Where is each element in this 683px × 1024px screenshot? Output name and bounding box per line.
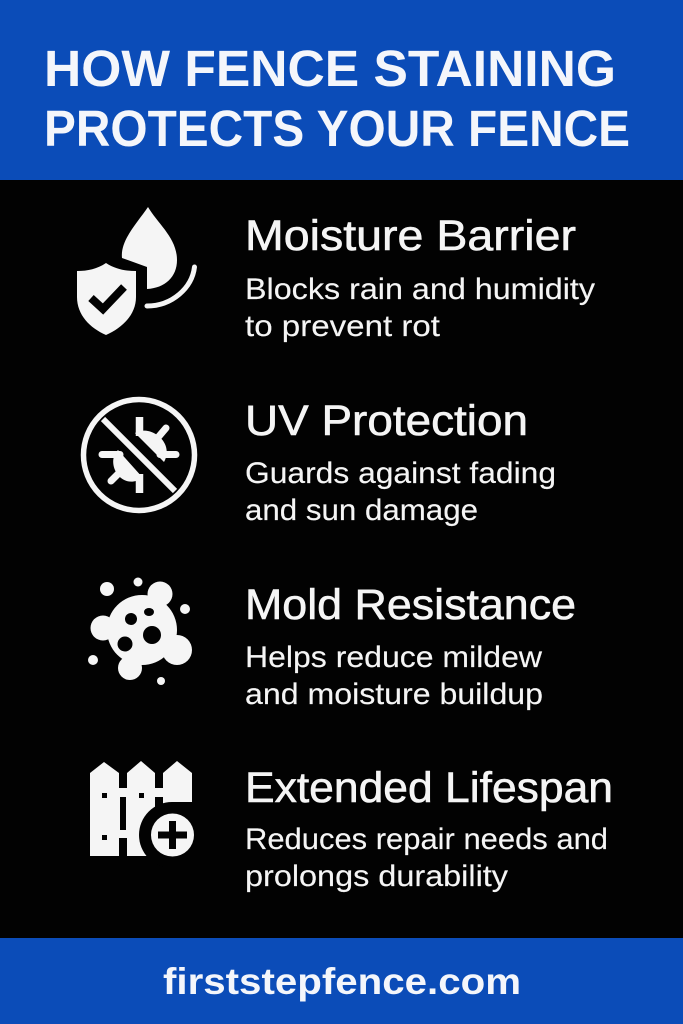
heading: moisture barrier: Moisture Barrier <box>245 213 576 260</box>
text: extended lifespan description <box>245 823 608 893</box>
text: extended lifespan description: Reduces repair needs and <box>245 823 608 856</box>
title <box>44 40 630 157</box>
footer banner <box>0 938 683 1024</box>
panel: uv protection <box>84 398 556 527</box>
text: uv protection description: and sun damage <box>245 494 478 527</box>
text: extended lifespan description: prolongs durability <box>245 860 508 893</box>
panel: mold resistance <box>88 578 576 711</box>
icon: water drop and shield <box>77 207 194 335</box>
text: moisture barrier description: Blocks rain and humidity <box>245 273 595 306</box>
header banner <box>0 0 683 180</box>
text: mold resistance description: Helps reduce mildew <box>245 641 542 674</box>
icon: mold spore <box>88 578 192 685</box>
heading: mold resistance: Mold Resistance <box>245 582 576 629</box>
icon: fence with plus <box>90 761 200 868</box>
text: moisture barrier description: to prevent rot <box>245 310 441 343</box>
panel: extended lifespan <box>90 761 613 893</box>
heading: extended lifespan: Extended Lifespan <box>245 765 613 812</box>
text: moisture barrier description <box>245 273 595 343</box>
title: PROTECTS YOUR FENCE <box>44 100 630 157</box>
text: mold resistance description <box>245 641 543 711</box>
panel: moisture barrier <box>77 207 595 343</box>
text: mold resistance description: and moisture buildup <box>245 678 543 711</box>
heading: uv protection: UV Protection <box>245 398 528 445</box>
text: uv protection description: Guards against fading <box>245 457 556 490</box>
website url: firststepfence.com <box>163 961 521 1002</box>
title: HOW FENCE STAINING <box>44 40 616 97</box>
icon: crossed-out sun <box>84 400 194 510</box>
text: uv protection description <box>245 457 556 527</box>
